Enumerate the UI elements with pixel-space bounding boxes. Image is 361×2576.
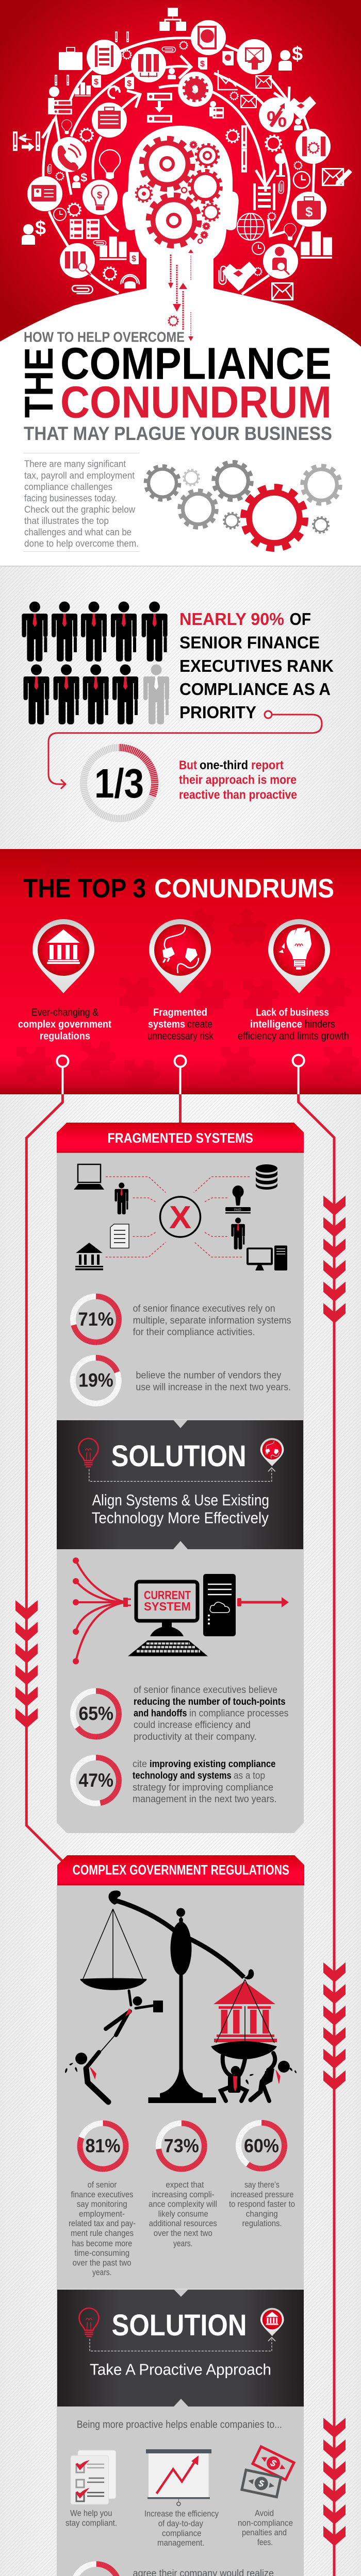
intro text block: that illustrates the top <box>24 516 109 526</box>
diagram: current system: SYSTEM <box>144 1600 191 1613</box>
caption: government: complex government <box>18 1019 111 1030</box>
icon: checklist <box>71 2450 116 2504</box>
column text 73%: expect that <box>166 2180 204 2190</box>
column text 60%: increased pressure <box>231 2190 293 2199</box>
ring: 71% <box>73 1296 119 1342</box>
main background <box>0 1094 361 2576</box>
column text 73%: increasing compli- <box>152 2190 215 2199</box>
diagram: disconnected systems: X <box>169 1200 191 1235</box>
intro text block: tax, payroll and employment <box>24 470 135 481</box>
ring: 19% <box>73 1358 119 1403</box>
ring: 73% <box>158 2123 204 2169</box>
caption: fragmented: systems <box>148 1019 185 1030</box>
one-third text <box>179 758 297 802</box>
solution band 2: Take A Proactive Approach <box>90 2361 271 2379</box>
intro gears <box>145 462 340 549</box>
panel: fragmented systems <box>57 1123 304 1833</box>
caption: stay compliant <box>65 2509 117 2528</box>
column text 73%: years. <box>173 2239 193 2248</box>
stat text 47%: cite <box>133 1759 147 1770</box>
stat text 65% <box>134 1685 288 1742</box>
red connector lines with chevrons <box>15 1094 346 2576</box>
title block: THAT MAY PLAGUE YOUR BUSINESS <box>24 423 332 444</box>
stat text 71%: multiple, separate information systems <box>133 1315 291 1326</box>
ring: 19%: 19% <box>78 1370 113 1391</box>
ring: 71%: 71% <box>78 1309 113 1330</box>
pin: government <box>32 919 94 993</box>
headline: nearly 90% <box>179 609 334 722</box>
column text 81% <box>69 2180 136 2277</box>
solution band 1: SOLUTION <box>111 1439 247 1473</box>
diagram: disconnected systems <box>74 1164 287 1270</box>
diagram: current system: CURRENT <box>144 1588 191 1602</box>
column text 73%: additional resources <box>149 2218 217 2228</box>
stat text 47%: technology and systems <box>133 1771 232 1782</box>
caption: penalties: fees. <box>257 2537 273 2547</box>
ring: one third <box>84 748 155 819</box>
ring: 65%: 65% <box>78 1703 113 1724</box>
caption: government: regulations <box>40 1030 90 1042</box>
disc icons: $ <box>305 204 313 219</box>
connecting arcs and arrows <box>42 38 314 294</box>
column text 60%: changing <box>246 2209 278 2219</box>
white icon discs <box>27 20 331 279</box>
puzzle texture <box>17 854 359 1095</box>
gears inside head <box>136 139 221 246</box>
stat text 65%: productivity at their company. <box>134 1732 257 1742</box>
caption: efficiency: Increase the efficiency <box>144 2509 219 2518</box>
column text 73% <box>149 2180 217 2248</box>
panel heading: COMPLEX GOVERNMENT REGULATIONS <box>73 1862 289 1877</box>
icon: money bills <box>240 2445 296 2499</box>
intro text block: done to help overcome them. <box>24 538 139 549</box>
title block: HOW TO HELP OVERCOME <box>24 329 185 345</box>
headline: nearly 90%: EXECUTIVES RANK <box>179 656 334 675</box>
caption: fragmented <box>147 1007 214 1042</box>
caption: fragmented: create <box>187 1019 212 1030</box>
stat text 47%: strategy for improving compliance <box>133 1783 273 1793</box>
column text 81%: has become more <box>72 2239 132 2248</box>
caption: penalties: penalties and <box>242 2528 287 2537</box>
intro text block: challenges and what can be <box>24 527 132 537</box>
ring: 60% <box>238 2123 285 2168</box>
one-third text: But <box>179 758 197 772</box>
caption: efficiency: compliance <box>162 2529 202 2538</box>
diagram: current system <box>73 1557 289 1664</box>
title block: COMPLIANCE <box>60 339 332 388</box>
icon: money bills: $ <box>257 2478 266 2489</box>
caption: intelligence: hinders <box>305 1019 335 1030</box>
column text 81%: say monitoring <box>77 2199 127 2209</box>
caption: government <box>18 1007 111 1042</box>
column text 81%: time-consuming <box>74 2248 129 2258</box>
stat text 47% <box>133 1759 277 1805</box>
one-third text: reactive than proactive <box>179 788 297 802</box>
headline: nearly 90%: NEARLY 90% <box>179 609 284 629</box>
caption: penalties: Avoid <box>255 2509 274 2518</box>
pin: fragmented systems <box>149 919 211 993</box>
section title: THE TOP 3 <box>23 874 146 904</box>
column text 73%: over the next two <box>154 2228 212 2238</box>
column text 81%: over the past two <box>73 2258 132 2267</box>
column text 73%: likely consume <box>158 2209 208 2219</box>
intro text block: There are many significant <box>24 459 126 469</box>
ring: 43% <box>73 2564 119 2576</box>
panel: complex government regulations <box>57 1855 304 2576</box>
column text 60%: regulations. <box>242 2218 282 2228</box>
solution band 1 <box>57 1419 303 1549</box>
column text 60%: to respond faster to <box>229 2199 295 2209</box>
column text 81%: ment rule changes <box>71 2228 134 2238</box>
dashed arrows in neck <box>171 255 191 338</box>
column text 60%: say there’s <box>244 2180 280 2190</box>
stat text 47%: management in the next two years. <box>133 1794 277 1805</box>
solution band 2 <box>57 2289 304 2406</box>
one-third text: their approach is more <box>179 773 297 787</box>
title block: THE <box>16 347 61 418</box>
headline: nearly 90%: COMPLIANCE AS A <box>179 680 331 699</box>
caption: intelligence: intelligence <box>250 1019 302 1030</box>
intro text block: compliance challenges <box>24 482 112 492</box>
pin: business intelligence <box>268 919 330 993</box>
caption: efficiency: management. <box>157 2538 204 2548</box>
title block: CONUNDRUM <box>60 378 332 428</box>
stat text 71%: for their compliance activities. <box>133 1327 255 1337</box>
caption: efficiency: of day-to-day <box>158 2518 203 2529</box>
stat text 19%: use will increase in the next two years. <box>136 1382 291 1393</box>
stat section background <box>0 566 361 849</box>
ring: 65% <box>73 1691 119 1737</box>
caption: stay compliant: We help you <box>70 2509 112 2518</box>
executives pictogram <box>22 602 169 724</box>
illustration: scales of regulation <box>65 1890 297 2103</box>
stat text 71% <box>133 1303 291 1337</box>
stat text 65%: and handoffs <box>134 1708 187 1719</box>
ring: 81% <box>80 2123 126 2169</box>
intro text block: facing businesses today. <box>24 493 117 503</box>
caption: stay compliant: stay compliant. <box>65 2518 117 2528</box>
ring: 73%: 73% <box>164 2136 199 2157</box>
icon: money bills: $ <box>268 2457 278 2469</box>
caption: government: Ever-changing & <box>31 1007 99 1018</box>
ring: 60%: 60% <box>244 2135 279 2156</box>
icon: rising chart <box>146 2449 211 2506</box>
solution band 1: Technology More Effectively <box>92 1509 269 1527</box>
stat text 19%: believe the number of vendors they <box>136 1370 282 1381</box>
stat text 65%: of senior finance executives believe <box>134 1685 277 1696</box>
column text 81%: finance executives <box>71 2190 133 2199</box>
solution band 1: Align Systems & Use Existing <box>92 1491 269 1509</box>
diagram: disconnected systems: PAID <box>234 1209 241 1212</box>
one-third text: report <box>251 758 284 772</box>
scattered white icons <box>13 8 352 300</box>
disc icons: $ <box>97 190 102 200</box>
stat text 71%: of senior finance executives rely on <box>133 1303 275 1314</box>
caption: intelligence: efficiency and limits growth <box>238 1030 349 1042</box>
one-third text: one-third <box>200 758 248 772</box>
red section: top 3 conundrums: CONUNDRUMS <box>154 874 334 904</box>
stat text 65%: reducing the number of touch-points <box>134 1697 286 1707</box>
panel heading <box>57 1123 304 1153</box>
caption: efficiency <box>144 2509 219 2548</box>
column text 81%: years. <box>92 2267 111 2277</box>
nodes <box>57 1055 304 1094</box>
ring: one third: 1/3 <box>94 760 144 806</box>
hero illustration: head with gears and compliance icons <box>0 0 361 361</box>
stat text 47%: improving existing compliance <box>150 1759 275 1770</box>
headline: nearly 90%: SENIOR FINANCE <box>179 633 320 652</box>
caption: fragmented: unnecessary risk <box>147 1030 214 1042</box>
caption: penalties: non-compliance <box>238 2518 293 2528</box>
headline: nearly 90%: OF <box>290 609 311 629</box>
panel heading <box>57 1855 304 1886</box>
disc icons <box>31 26 325 275</box>
stat text 65%: could increase efficiency and <box>134 1720 251 1731</box>
stat text 19% <box>136 1370 291 1393</box>
red section: top 3 conundrums <box>0 849 361 1095</box>
disc icons: $ <box>192 83 198 96</box>
stat text 65%: in compliance processes <box>189 1708 288 1719</box>
column text 60% <box>229 2180 295 2228</box>
ring: 81%: 81% <box>86 2136 121 2157</box>
caption: fragmented: Fragmented <box>153 1007 207 1018</box>
caption: intelligence <box>238 1007 349 1042</box>
proactive lead-in text: Being more proactive helps enable companies to... <box>77 2419 282 2431</box>
disc icons: % <box>267 107 287 132</box>
intro text block <box>23 453 140 552</box>
head and shoulders silhouette <box>0 126 361 361</box>
ring: 47%: 47% <box>78 1770 113 1791</box>
headline: nearly 90%: PRIORITY <box>179 703 256 722</box>
stat text 47%: as a top <box>234 1771 265 1782</box>
solution band 2: SOLUTION <box>111 2309 247 2342</box>
intro text block: Check out the graphic below <box>24 504 136 515</box>
panel heading: FRAGMENTED SYSTEMS <box>107 1130 253 1146</box>
connector arrow <box>48 711 322 789</box>
column text 73%: ance complexity will <box>149 2199 217 2209</box>
ring: 47% <box>73 1757 119 1803</box>
caption: intelligence: Lack of business <box>256 1007 329 1018</box>
caption: penalties <box>238 2509 293 2547</box>
column text 81%: of senior <box>88 2180 117 2190</box>
column text 81%: related tax and pay- <box>69 2218 136 2228</box>
column text 81%: employment- <box>79 2209 125 2219</box>
title block <box>16 329 332 444</box>
